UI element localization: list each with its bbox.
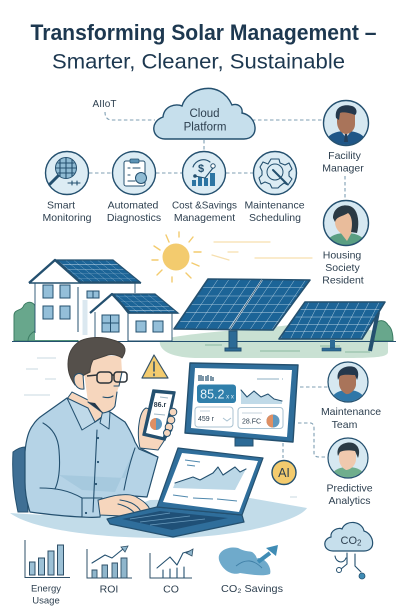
desk	[10, 498, 307, 538]
badge: AI	[272, 460, 296, 484]
avatar: housing society resident	[324, 200, 368, 246]
label: smart monitoring: Monitoring	[42, 212, 92, 224]
label: housing society resident: Resident	[322, 274, 364, 286]
label: cost and savings: Cost &Savings	[172, 200, 237, 212]
metric card: 85.2 x x	[200, 388, 234, 402]
label: maintenance scheduling	[244, 200, 305, 224]
right stat card: 28.FC	[242, 418, 261, 426]
left stat card: 459 r	[198, 416, 215, 423]
label: housing society resident: Society	[325, 262, 360, 274]
collar	[67, 398, 110, 430]
ground and landscape	[12, 302, 396, 358]
icon: warning triangle	[142, 355, 168, 378]
icon: cost and savings: $	[198, 163, 204, 175]
label: automated diagnostics	[107, 200, 161, 224]
icon: CO2 cloud network	[325, 522, 373, 579]
typing hand	[98, 495, 150, 517]
icon: CO2 savings cloud	[219, 545, 278, 575]
label: AIIoT: AIIoT	[93, 99, 116, 110]
icon: CO2 cloud network: CO	[341, 535, 357, 547]
label: maintenance scheduling: Scheduling	[249, 212, 301, 224]
smartphone: 86.r	[154, 402, 166, 409]
chair	[13, 447, 28, 512]
label: maintenance scheduling: Maintenance	[244, 200, 305, 212]
label: automated diagnostics: Diagnostics	[107, 212, 161, 224]
badge: AI: AI	[278, 466, 290, 480]
person with phone	[13, 337, 172, 517]
label: maintenance team: Maintenance	[321, 406, 381, 418]
avatar: predictive analytics	[328, 438, 368, 478]
label: energy usage	[31, 584, 61, 606]
label: housing society resident: Housing	[323, 250, 361, 262]
label: automated diagnostics: Automated	[108, 200, 159, 212]
label: predictive analytics: Predictive	[326, 482, 373, 494]
title: Smarter, Cleaner, Sustainable	[52, 50, 345, 74]
monitor dashboard	[185, 363, 298, 446]
label: predictive analytics	[326, 482, 373, 507]
label: facility manager: Facility	[328, 150, 362, 162]
cloud platform: Cloud	[189, 108, 220, 120]
chart: energy usage	[25, 540, 70, 578]
motion lines	[24, 358, 297, 497]
chart: ROI	[87, 546, 132, 578]
connector lines: cloud network	[89, 112, 345, 200]
face	[84, 356, 122, 413]
neck	[67, 392, 108, 422]
label: energy usage: Energy	[31, 584, 61, 594]
label: energy usage: Usage	[32, 596, 60, 606]
phone hand	[138, 408, 172, 450]
connector lines: dashboard	[283, 387, 328, 458]
label: cost and savings	[172, 200, 237, 224]
icon: maintenance scheduling	[254, 152, 296, 194]
avatar: facility manager	[324, 100, 368, 146]
label: maintenance team: Team	[332, 419, 358, 431]
laptop	[107, 448, 263, 537]
houses with rooftop solar	[29, 260, 178, 341]
icon: CO2 cloud network: 2	[357, 538, 362, 548]
avatar: maintenance team	[328, 362, 368, 402]
label: CO2 savings: CO₂ Savings	[221, 583, 283, 595]
label: ROI: ROI	[100, 584, 118, 596]
dashboard header	[199, 375, 213, 381]
label: predictive analytics: Analytics	[328, 495, 371, 507]
icon: cost and savings	[182, 152, 226, 194]
large solar panel array	[174, 279, 310, 351]
label: smart monitoring	[42, 200, 92, 224]
ear	[74, 374, 84, 389]
title	[30, 20, 376, 74]
chart: CO	[150, 549, 193, 578]
shirt	[25, 398, 158, 517]
hair	[68, 337, 125, 385]
label: facility manager: Manager	[322, 162, 364, 174]
cloud platform	[154, 88, 255, 139]
label: maintenance team	[321, 406, 381, 431]
line chart	[241, 390, 282, 404]
small solar panel array	[279, 302, 385, 351]
icon: sun	[152, 232, 312, 282]
icon: automated diagnostics	[112, 152, 156, 194]
label: facility manager	[322, 150, 364, 174]
label: smart monitoring: Smart	[47, 200, 75, 212]
cloud platform: Platform	[184, 122, 226, 134]
label: cost and savings: Management	[174, 212, 235, 224]
label: CO: CO	[163, 584, 179, 596]
glasses	[87, 372, 127, 383]
smartphone	[143, 390, 177, 440]
label: housing society resident	[322, 250, 364, 286]
icon: smart monitoring	[46, 152, 88, 194]
title: Transforming Solar Management –	[30, 20, 376, 45]
